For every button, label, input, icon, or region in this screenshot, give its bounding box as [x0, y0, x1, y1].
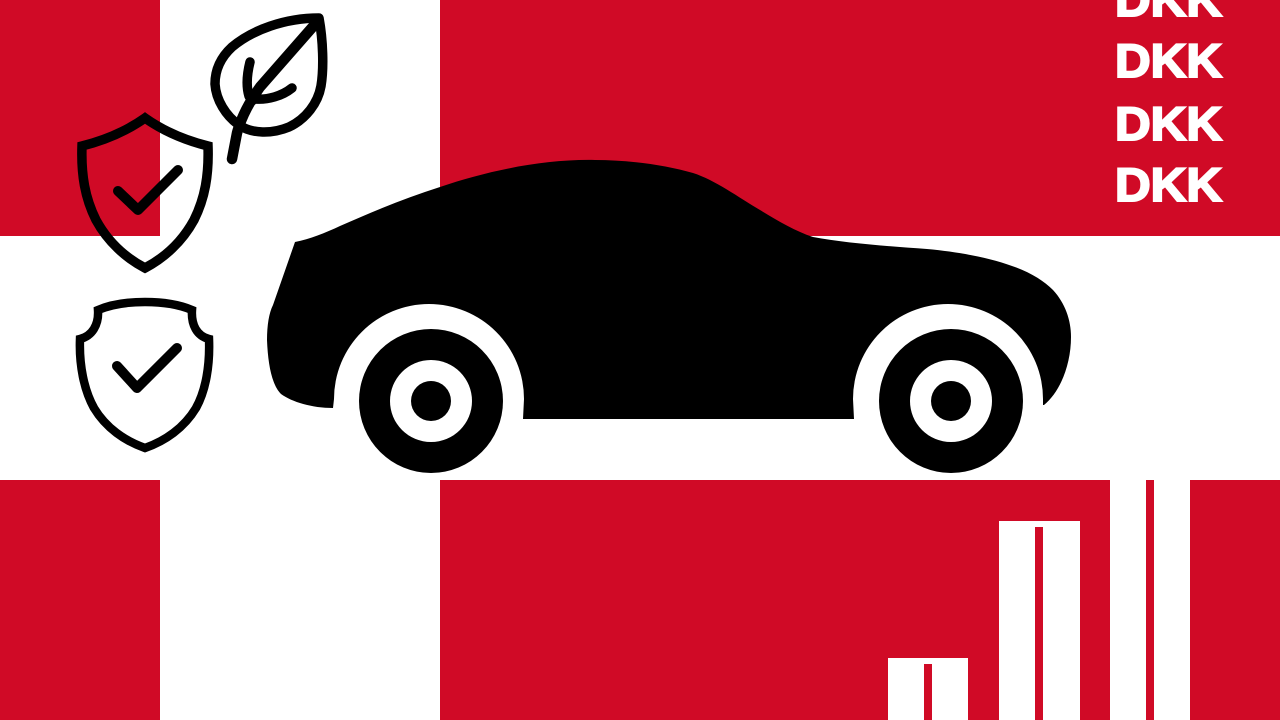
currency labels: DKK	[1115, 0, 1222, 211]
bar: short	[888, 658, 968, 720]
text: DKK second row: DKK	[1115, 34, 1222, 87]
bar chart: rising white bars	[888, 480, 1190, 720]
icon: leaf	[215, 18, 323, 159]
panel: bottom-left red block	[0, 480, 160, 720]
front wheel	[879, 329, 1023, 473]
rear wheel	[359, 329, 503, 473]
bar: tall	[1110, 480, 1190, 720]
icon: car silhouette	[267, 160, 1071, 473]
panel: top-left red block	[0, 0, 160, 236]
icon: shield with check on red block	[82, 118, 208, 268]
text: DKK third row: DKK	[1115, 97, 1222, 150]
icon: shield with check on white	[80, 302, 209, 448]
panel: bottom-right red block	[440, 480, 1280, 720]
panel: top-right red block	[440, 0, 1280, 236]
text: DKK fourth row: DKK	[1115, 158, 1222, 211]
bar: medium	[999, 521, 1080, 720]
car body	[267, 160, 1071, 419]
